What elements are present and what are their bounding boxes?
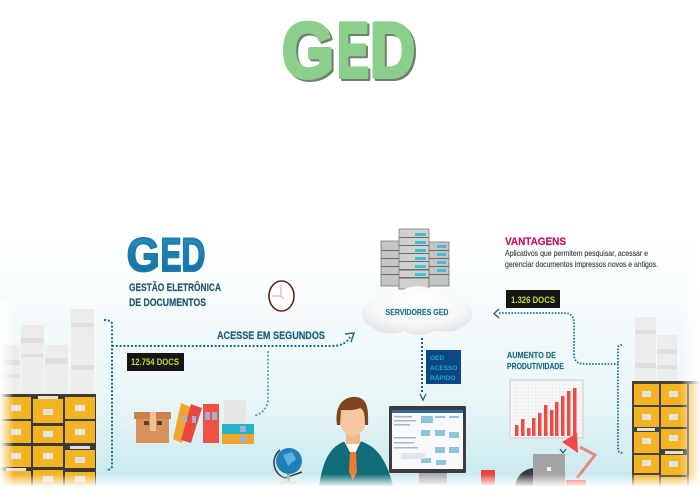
main title: D [372, 8, 417, 96]
icon: binders and folders [173, 400, 254, 444]
text: vantagens description: gerenciar documentos impressos novos e antigos. [505, 260, 658, 269]
main title: E [339, 8, 371, 96]
icon: server racks [381, 229, 449, 291]
right edge fade [680, 235, 700, 490]
counter: 12.754 docs [127, 353, 184, 371]
icon: clock [269, 281, 294, 311]
icon: mug [481, 470, 495, 485]
subtitle: Gestão Eletrônica de Documentos: DE DOCUMENTOS [129, 297, 206, 309]
main title: G [284, 8, 336, 96]
label: aumento de produtividade: AUMENTO DE [507, 350, 556, 360]
label: acesse em segundos: ACESSE EM SEGUNDOS [217, 330, 325, 342]
callout: GED acesso rápido [426, 350, 461, 384]
dotted arrow: servers to monitor [420, 338, 426, 400]
callout: GED acesso rápido: GED [430, 355, 444, 362]
label: aumento de produtividade [507, 350, 564, 371]
bottom fade [0, 474, 700, 487]
icon: desk lamp [560, 433, 595, 486]
GED logo heading: E [160, 228, 182, 281]
monitor with GED screen [389, 406, 466, 484]
counter: 12.754 docs: 12.754 DOCS [131, 357, 179, 367]
label: aumento de produtividade: PRODUTIVIDADE [507, 361, 564, 371]
right filing cabinet [632, 381, 700, 486]
cloud: servidores GED: SERVIDORES GED [386, 307, 448, 317]
heading: vantagens: VANTAGENS [505, 236, 566, 248]
icon: cardboard box [134, 412, 171, 443]
person [319, 397, 393, 486]
main title [282, 6, 417, 96]
dotted connector: left cabinet to servers [104, 320, 350, 470]
callout: GED acesso rápido: RÁPIDO [430, 373, 455, 382]
icon: laptop [515, 454, 565, 486]
counter: 1.326 docs: 1.326 DOCS [511, 295, 555, 305]
left paper stacks [0, 309, 94, 395]
main title: E [337, 6, 369, 94]
subtitle: Gestão Eletrônica de Documentos [129, 281, 221, 309]
subtitle: Gestão Eletrônica de Documentos: GESTÃO ELETRÔNICA [129, 281, 221, 294]
left edge fade [0, 300, 14, 490]
GED logo heading: G [127, 228, 160, 281]
callout: GED acesso rápido: ACESSO [430, 365, 457, 372]
cloud: servidores GED [362, 286, 472, 335]
right paper stacks [635, 317, 677, 382]
bar chart: productivity [510, 380, 583, 438]
left filing cabinet [0, 394, 96, 486]
GED logo heading: D [181, 228, 205, 281]
GED logo heading [127, 228, 205, 281]
arrow: towards servers [345, 333, 354, 342]
text: vantagens description [505, 249, 658, 269]
dotted arrow: right cabinet to servers [494, 309, 624, 453]
icon: globe [274, 448, 302, 484]
counter: 1.326 docs [506, 290, 560, 308]
text: vantagens description: Aplicativos que permitem pesquisar, acessar e [505, 249, 648, 258]
main title: D [370, 6, 415, 94]
main title: G [282, 6, 334, 94]
background wash [0, 235, 700, 486]
